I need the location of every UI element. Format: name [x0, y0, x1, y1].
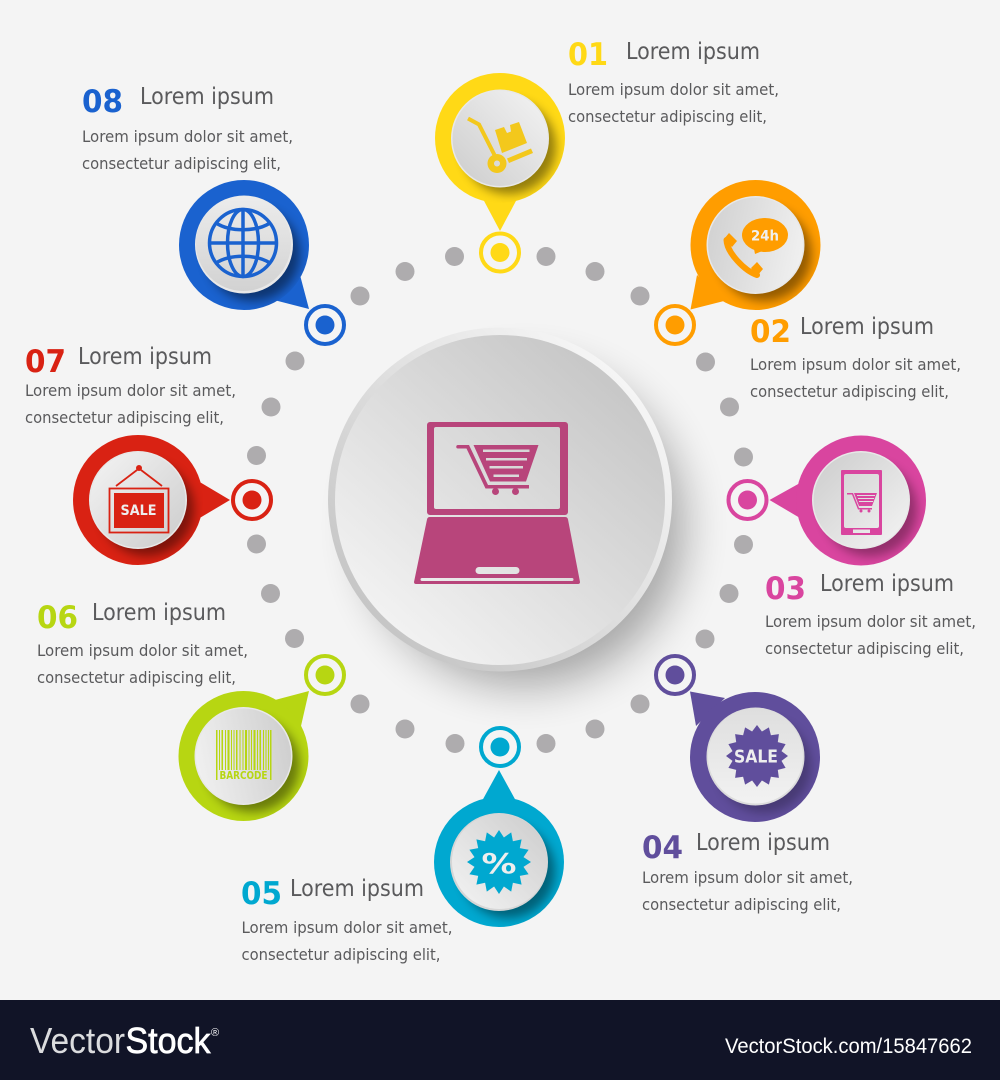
- text block 05: [241, 874, 452, 964]
- text block 08: Lorem ipsum dolor sit amet,: [82, 127, 293, 146]
- icon: 24h phone: [724, 218, 788, 276]
- target ring: [306, 656, 344, 694]
- step 02: orange marker: [656, 180, 820, 344]
- footer image id: VectorStock.com/15847662: [725, 1035, 972, 1058]
- text block 03: Lorem ipsum: [820, 569, 954, 597]
- target ring: [656, 306, 694, 344]
- icon: percent burst: [467, 830, 531, 894]
- step 06: lime marker: [178, 656, 344, 821]
- text block 04: Lorem ipsum dolor sit amet,: [642, 868, 853, 887]
- icon: 24h phone: 24h: [751, 228, 779, 244]
- text block 07: Lorem ipsum: [78, 342, 212, 370]
- dotted ring: [247, 247, 753, 753]
- footer logo: Vector: [30, 1020, 125, 1061]
- step 01: yellow marker: [435, 73, 565, 272]
- text block 02: Lorem ipsum dolor sit amet,: [750, 355, 961, 374]
- text block 01: consectetur adipiscing elit,: [568, 107, 767, 126]
- step 07: red marker: [73, 435, 271, 565]
- text block 03: Lorem ipsum dolor sit amet,: [765, 612, 976, 631]
- icon: barcode: BARCODE: [220, 770, 268, 782]
- target ring: [306, 306, 344, 344]
- text block 04: [642, 828, 853, 914]
- icon: sale burst: SALE: [734, 746, 778, 768]
- text block 04: Lorem ipsum: [696, 828, 830, 856]
- icon: barcode: [216, 730, 272, 782]
- text block 08: Lorem ipsum: [140, 82, 274, 110]
- text block 07: consectetur adipiscing elit,: [25, 408, 224, 427]
- icon: smartphone with cart: [841, 470, 882, 535]
- text block 06: Lorem ipsum: [92, 598, 226, 626]
- step 04: purple marker: [656, 656, 820, 822]
- icon: sale burst: [726, 725, 788, 787]
- text block 06: Lorem ipsum dolor sit amet,: [37, 641, 248, 660]
- text block 01: [568, 37, 779, 126]
- text block 07: Lorem ipsum dolor sit amet,: [25, 381, 236, 400]
- text block 05: consectetur adipiscing elit,: [242, 945, 440, 964]
- centre disc with laptop: [328, 328, 684, 686]
- step 05: cyan marker: [434, 728, 564, 927]
- text block 06: consectetur adipiscing elit,: [37, 668, 236, 687]
- text block 02: Lorem ipsum: [800, 312, 934, 340]
- target ring: [233, 481, 271, 519]
- text block 04: 04: [642, 830, 683, 866]
- icon: hanging sale sign: [110, 465, 168, 532]
- text block 07: [25, 342, 236, 427]
- text block 01: 01: [568, 37, 608, 73]
- footer logo: ®: [211, 1027, 219, 1039]
- text block 02: 02: [750, 314, 791, 350]
- text block 06: [37, 598, 248, 687]
- target ring: [656, 656, 694, 694]
- icon: laptop with shopping cart: [414, 422, 580, 584]
- target ring: [728, 481, 766, 519]
- text block 07: 07: [25, 344, 66, 380]
- footer bar: [0, 1000, 1000, 1080]
- text block 03: [765, 569, 976, 658]
- text block 01: Lorem ipsum dolor sit amet,: [568, 80, 779, 99]
- icon: hand truck with box: [468, 118, 533, 173]
- text block 08: consectetur adipiscing elit,: [82, 154, 281, 173]
- target ring: [481, 234, 519, 272]
- step 03: magenta marker: [728, 436, 926, 566]
- text block 08: [82, 82, 293, 173]
- icon: hanging sale sign: SALE: [120, 503, 156, 519]
- text block 02: consectetur adipiscing elit,: [750, 382, 949, 401]
- text block 08: 08: [82, 84, 123, 120]
- text block 05: Lorem ipsum dolor sit amet,: [242, 918, 452, 937]
- icon: globe: [210, 210, 276, 276]
- text block 02: [750, 312, 961, 401]
- footer logo: [30, 1020, 219, 1061]
- text block 01: Lorem ipsum: [626, 37, 760, 65]
- text block 03: 03: [765, 571, 806, 607]
- target ring: [481, 728, 519, 766]
- text block 04: consectetur adipiscing elit,: [642, 895, 841, 914]
- footer logo: Stock: [126, 1020, 211, 1061]
- text block 06: 06: [37, 600, 78, 636]
- icon: percent burst: %: [482, 847, 516, 880]
- text block 05: 05: [241, 876, 282, 912]
- step 08: blue marker: [179, 180, 344, 344]
- text block 03: consectetur adipiscing elit,: [765, 639, 964, 658]
- text block 05: Lorem ipsum: [290, 874, 424, 902]
